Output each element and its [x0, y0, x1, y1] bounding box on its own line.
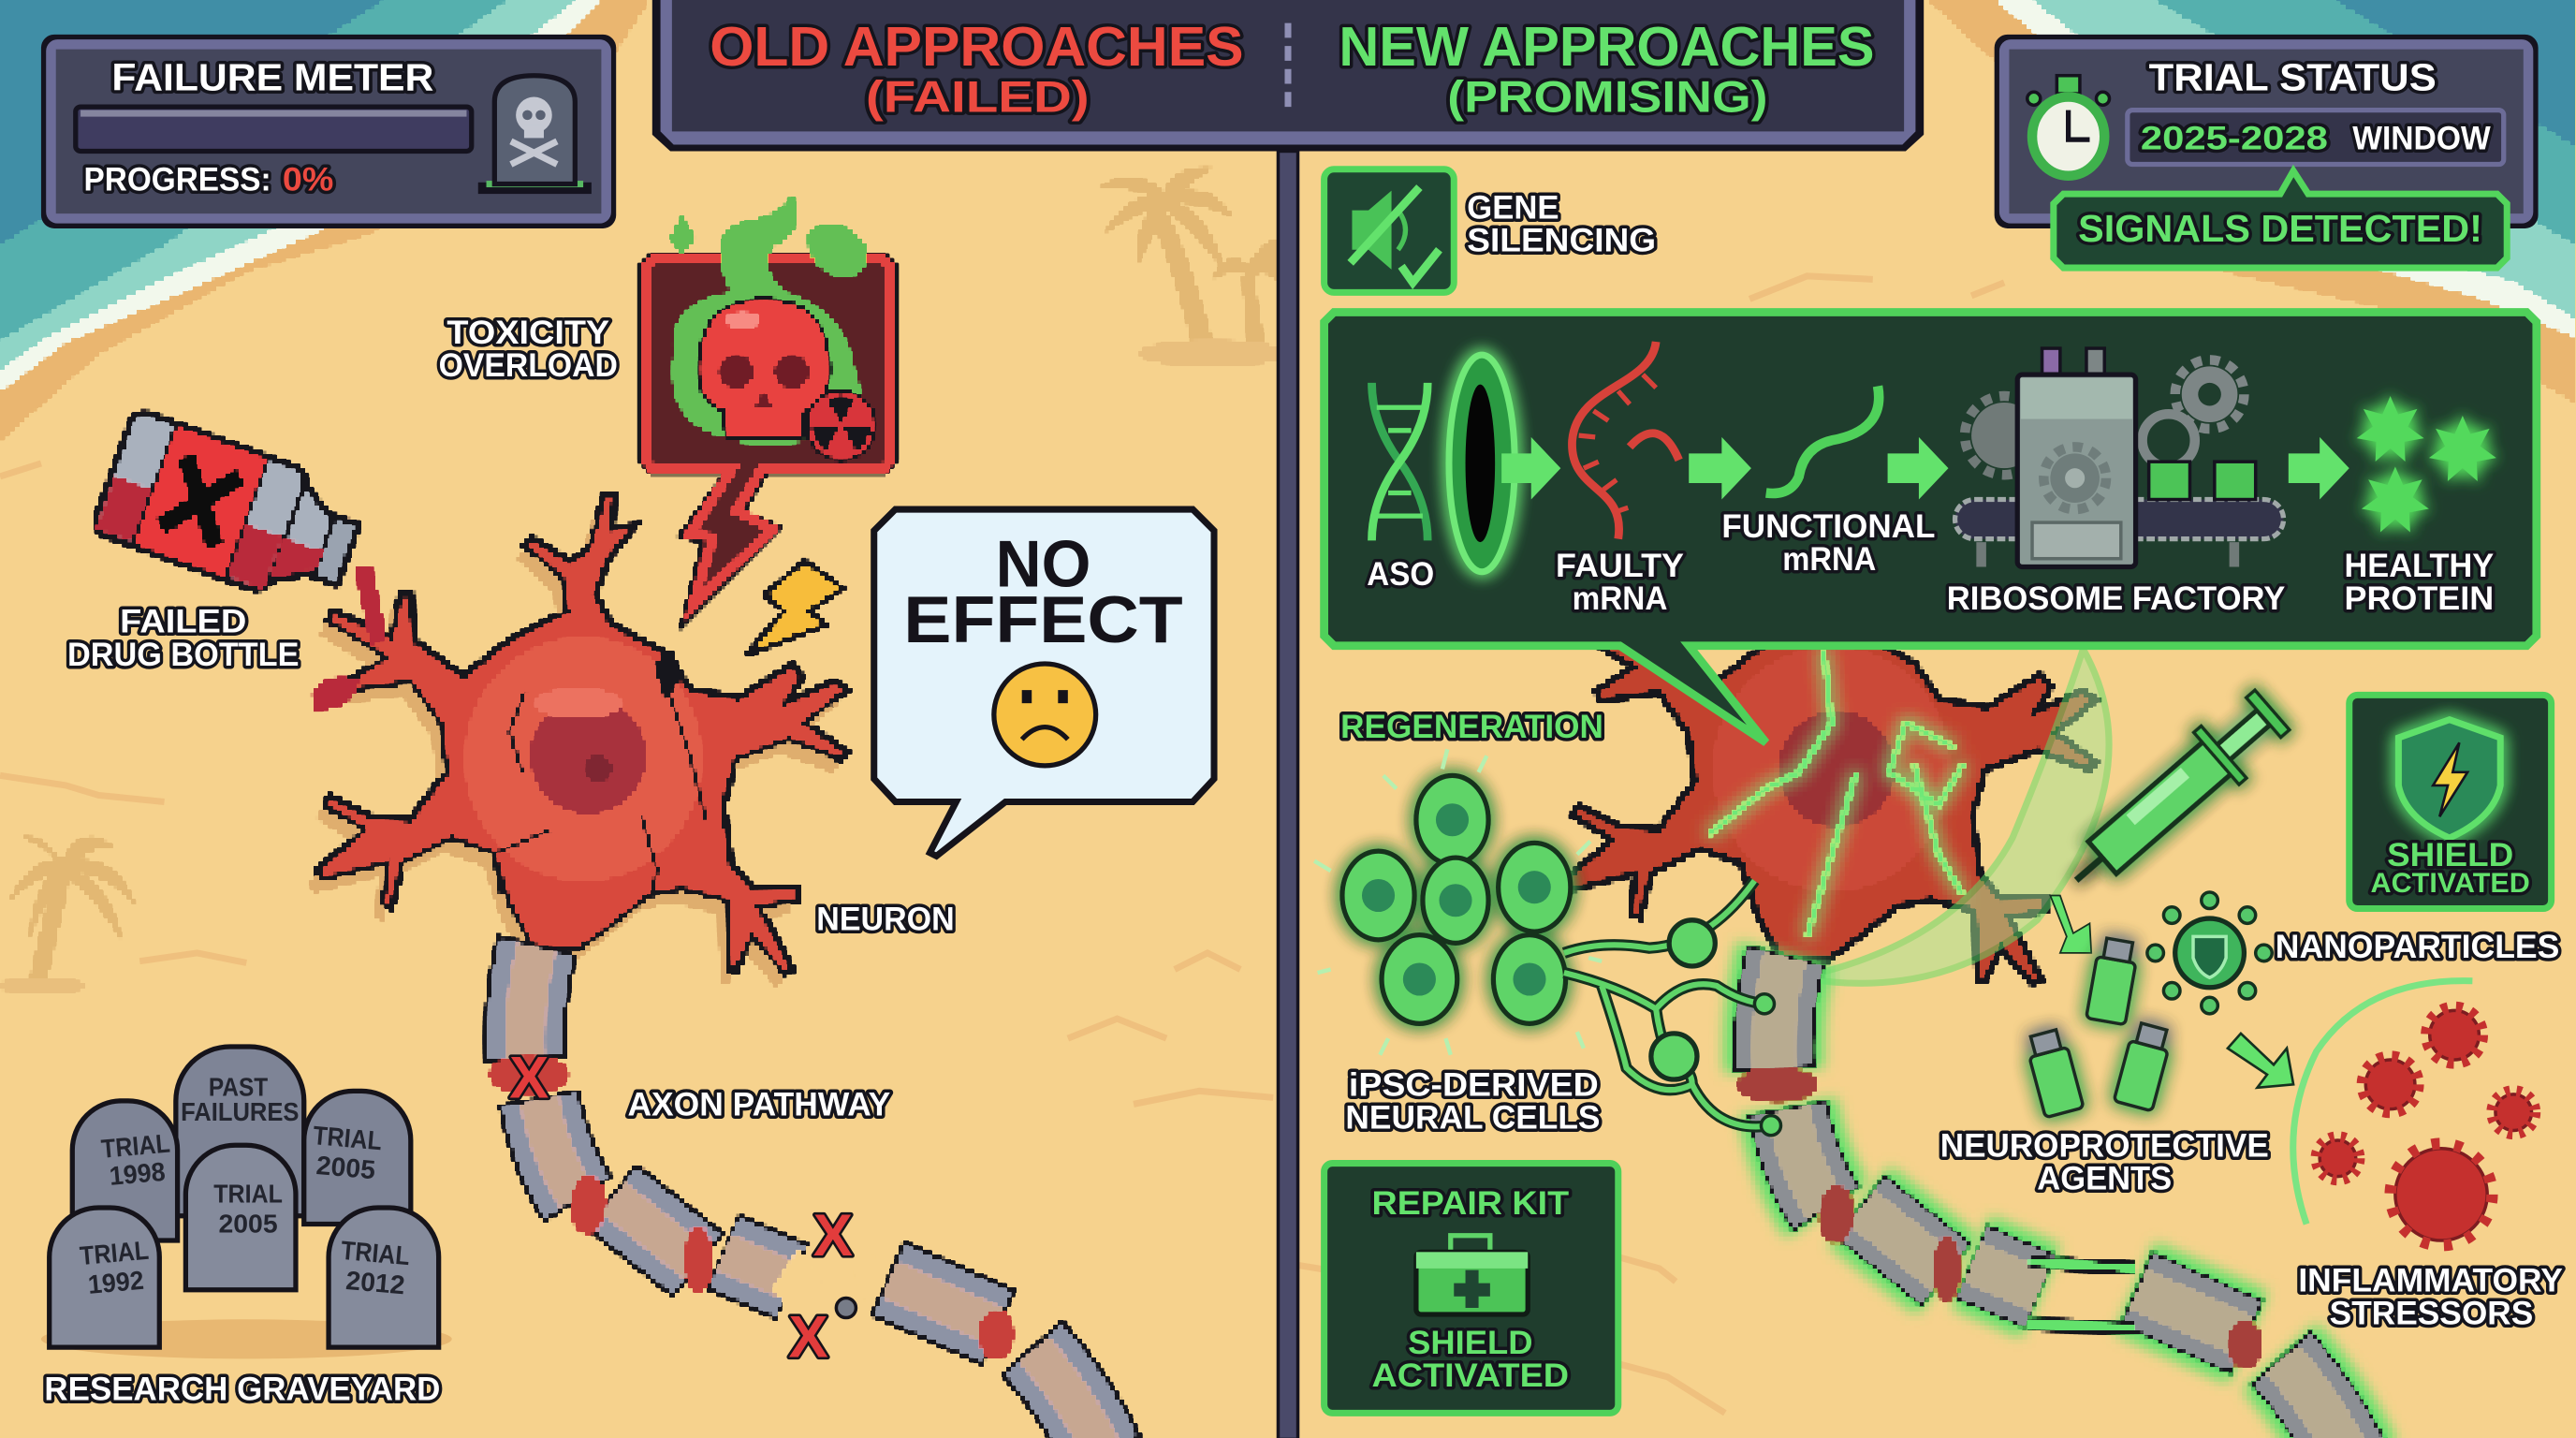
gravestone: trial 2005 right: TRIAL — [312, 1121, 383, 1155]
icon: stopwatch — [2027, 76, 2110, 176]
date window: 2025-2028 — [2141, 121, 2328, 157]
ocean top right — [1928, 0, 2576, 403]
central divider — [1278, 151, 1298, 1438]
arrow toward nanoparticles — [2050, 895, 2091, 953]
shield activated panel: ACTIVATED — [2371, 868, 2530, 899]
label: gene silencing: SILENCING — [1467, 223, 1656, 259]
skull — [698, 299, 829, 437]
label: toxicity overload: OVERLOAD — [439, 347, 618, 384]
date window — [2128, 110, 2504, 165]
gene silencing icon box — [1325, 169, 1454, 292]
icon: sad face — [994, 664, 1096, 766]
ocean top left — [0, 0, 649, 440]
gravestone: trial 2012 — [329, 1208, 439, 1347]
research graveyard — [41, 1047, 452, 1358]
labels: mechanism steps: mRNA — [1782, 541, 1876, 578]
iPSC neural cells cluster — [1314, 749, 1602, 1055]
failure meter panel: FAILURE METER — [111, 56, 433, 99]
gravestone: trial 1992 — [50, 1208, 159, 1347]
icon: gravestone with skull — [478, 76, 592, 194]
top banner — [652, 0, 1924, 151]
regenerating green cracks — [1708, 649, 1963, 936]
label: axon pathway: AXON PATHWAY — [627, 1087, 890, 1123]
shield arc — [2293, 981, 2472, 1224]
repair kit panel: REPAIR KIT — [1372, 1185, 1570, 1222]
progress readout: 0% — [283, 162, 333, 198]
gravestone: trial 2005 right — [304, 1091, 411, 1224]
heading: old approaches — [710, 15, 1244, 122]
icon: healthy proteins — [2357, 396, 2496, 532]
left neuron — [309, 496, 846, 986]
gravestone: trial 2012: TRIAL — [340, 1236, 411, 1270]
arrow 1 — [1501, 437, 1560, 500]
icon: green portal — [1449, 355, 1515, 572]
repair kit panel: ACTIVATED — [1372, 1357, 1569, 1394]
gravestone: trial 2005 center: 2005 — [218, 1209, 278, 1238]
gravestone: trial 2005 right: 2005 — [315, 1151, 376, 1184]
right neuron — [1566, 506, 2095, 983]
gravestone: trial 1998: TRIAL — [100, 1129, 171, 1164]
signals detected callout: SIGNALS DETECTED! — [2078, 207, 2482, 250]
green neurites connecting cells to axon — [1564, 881, 1781, 1136]
break marks on axon — [509, 1045, 856, 1371]
label: iPSC-derived neural cells: iPSC-DERIVED — [1349, 1067, 1599, 1104]
trial status panel: TRIAL STATUS — [2149, 56, 2437, 99]
label: inflammatory stressors — [2298, 1262, 2563, 1332]
labels: mechanism steps: ASO — [1367, 556, 1434, 593]
no effect speech bubble — [874, 509, 1214, 856]
labels: mechanism steps: RIBOSOME FACTORY — [1947, 580, 2285, 617]
failed drug bottle — [92, 410, 386, 710]
label: neuroprotective agents: AGENTS — [2037, 1161, 2172, 1197]
label: iPSC-derived neural cells: NEURAL CELLS — [1345, 1100, 1600, 1137]
label: gene silencing — [1467, 189, 1656, 259]
heading: old approaches: OLD APPROACHES — [710, 15, 1244, 78]
date window: WINDOW — [2352, 121, 2492, 157]
icon: ASO DNA — [1372, 383, 1427, 540]
heading: new approaches: NEW APPROACHES — [1339, 15, 1875, 78]
inflammatory stressor viruses — [2317, 1007, 2535, 1245]
break marks on axon: X — [813, 1203, 853, 1269]
label: failed drug bottle: DRUG BOTTLE — [67, 637, 299, 673]
labels: mechanism steps: FUNCTIONAL — [1721, 508, 1935, 545]
gravestone: past failures: FAILURES — [181, 1097, 299, 1126]
neuron cracks — [493, 654, 707, 901]
gravestone: trial 2005 center: TRIAL — [213, 1180, 283, 1209]
label: failed drug bottle: FAILED — [120, 604, 246, 640]
label: neuroprotective agents: NEUROPROTECTIVE — [1940, 1128, 2269, 1165]
empty meter bar — [76, 107, 472, 151]
break marks on axon: X — [788, 1305, 828, 1371]
shield activated panel: SHIELD — [2387, 837, 2513, 873]
label: neuroprotective agents — [1940, 1128, 2269, 1197]
gravestone: trial 1998 — [72, 1101, 178, 1240]
label: toxicity overload — [439, 315, 618, 384]
label: iPSC-derived neural cells — [1345, 1067, 1600, 1137]
green toxic smoke — [670, 194, 867, 446]
heading: old approaches: (FAILED) — [866, 72, 1090, 122]
ASO mechanism panel — [1325, 312, 2537, 742]
icon: functional mRNA — [1766, 386, 1879, 493]
gravestone: trial 2012: 2012 — [344, 1266, 406, 1299]
axon bridge — [2029, 1262, 2136, 1328]
spilled drug — [313, 565, 386, 710]
gravestone: trial 2005 center — [185, 1145, 296, 1290]
sparkles around cells — [1314, 749, 1602, 1055]
palm tree right of left panel — [1097, 168, 1284, 366]
labels: mechanism steps: HEALTHY — [2344, 548, 2494, 584]
label: research graveyard: RESEARCH GRAVEYARD — [44, 1371, 440, 1407]
arrow 2 — [1689, 437, 1751, 500]
repaired axon — [1738, 955, 2352, 1438]
arrow 4 — [2289, 437, 2349, 500]
label: toxicity overload: TOXICITY — [446, 315, 609, 351]
neuroprotective agent vials — [2025, 937, 2174, 1118]
labels: mechanism steps — [1367, 508, 2494, 617]
repair kit panel: SHIELD — [1408, 1325, 1532, 1361]
icon: syringe — [2054, 684, 2295, 906]
arrow toward stressors — [2228, 1034, 2293, 1088]
gravestone: trial 1992: 1992 — [87, 1266, 145, 1299]
icon: yellow lightning bolt — [748, 562, 842, 654]
label: regeneration: REGENERATION — [1340, 709, 1603, 745]
label: inflammatory stressors: INFLAMMATORY — [2298, 1262, 2563, 1299]
labels: mechanism steps: FAULTY — [1556, 548, 1684, 584]
label: inflammatory stressors: STRESSORS — [2330, 1296, 2533, 1332]
gravestone: past failures — [176, 1047, 304, 1216]
signals detected callout — [2054, 171, 2507, 268]
label: neuron: NEURON — [816, 901, 955, 937]
gravestone: trial 1992: TRIAL — [79, 1236, 150, 1270]
repair kit panel — [1325, 1164, 1618, 1413]
heading: new approaches: (PROMISING) — [1447, 72, 1767, 122]
gravestone: past failures: PAST — [209, 1073, 268, 1102]
label: failed drug bottle — [67, 604, 299, 673]
icon: faulty mRNA — [1572, 342, 1679, 539]
protective bubble shield around neuron — [1799, 649, 2109, 983]
gravestone: trial 1998: 1998 — [109, 1157, 167, 1191]
no effect speech bubble: EFFECT — [903, 582, 1183, 656]
icon: first aid kit — [1416, 1236, 1528, 1314]
radiation badge — [807, 391, 875, 460]
no effect speech bubble: NO — [996, 527, 1090, 601]
toxicity callout — [641, 194, 896, 626]
label: gene silencing: GENE — [1467, 189, 1559, 226]
progress readout: PROGRESS: — [84, 162, 271, 198]
shield activated panel — [2349, 695, 2552, 909]
icon: ribosome factory — [1955, 348, 2284, 566]
icon: nanoparticle — [2147, 892, 2272, 1014]
labels: mechanism steps: mRNA — [1573, 580, 1667, 617]
trial status panel — [1995, 35, 2539, 228]
axon pathway left — [490, 945, 1104, 1438]
arrow 3 — [1888, 437, 1949, 500]
failure meter panel — [41, 35, 616, 228]
icon: shield with bolt — [2398, 720, 2500, 838]
palm tree lower left — [0, 836, 135, 994]
label: nanoparticles: NANOPARTICLES — [2276, 929, 2559, 965]
break marks on axon: X — [509, 1045, 549, 1110]
labels: mechanism steps: PROTEIN — [2344, 580, 2494, 617]
heading: new approaches — [1339, 15, 1875, 122]
